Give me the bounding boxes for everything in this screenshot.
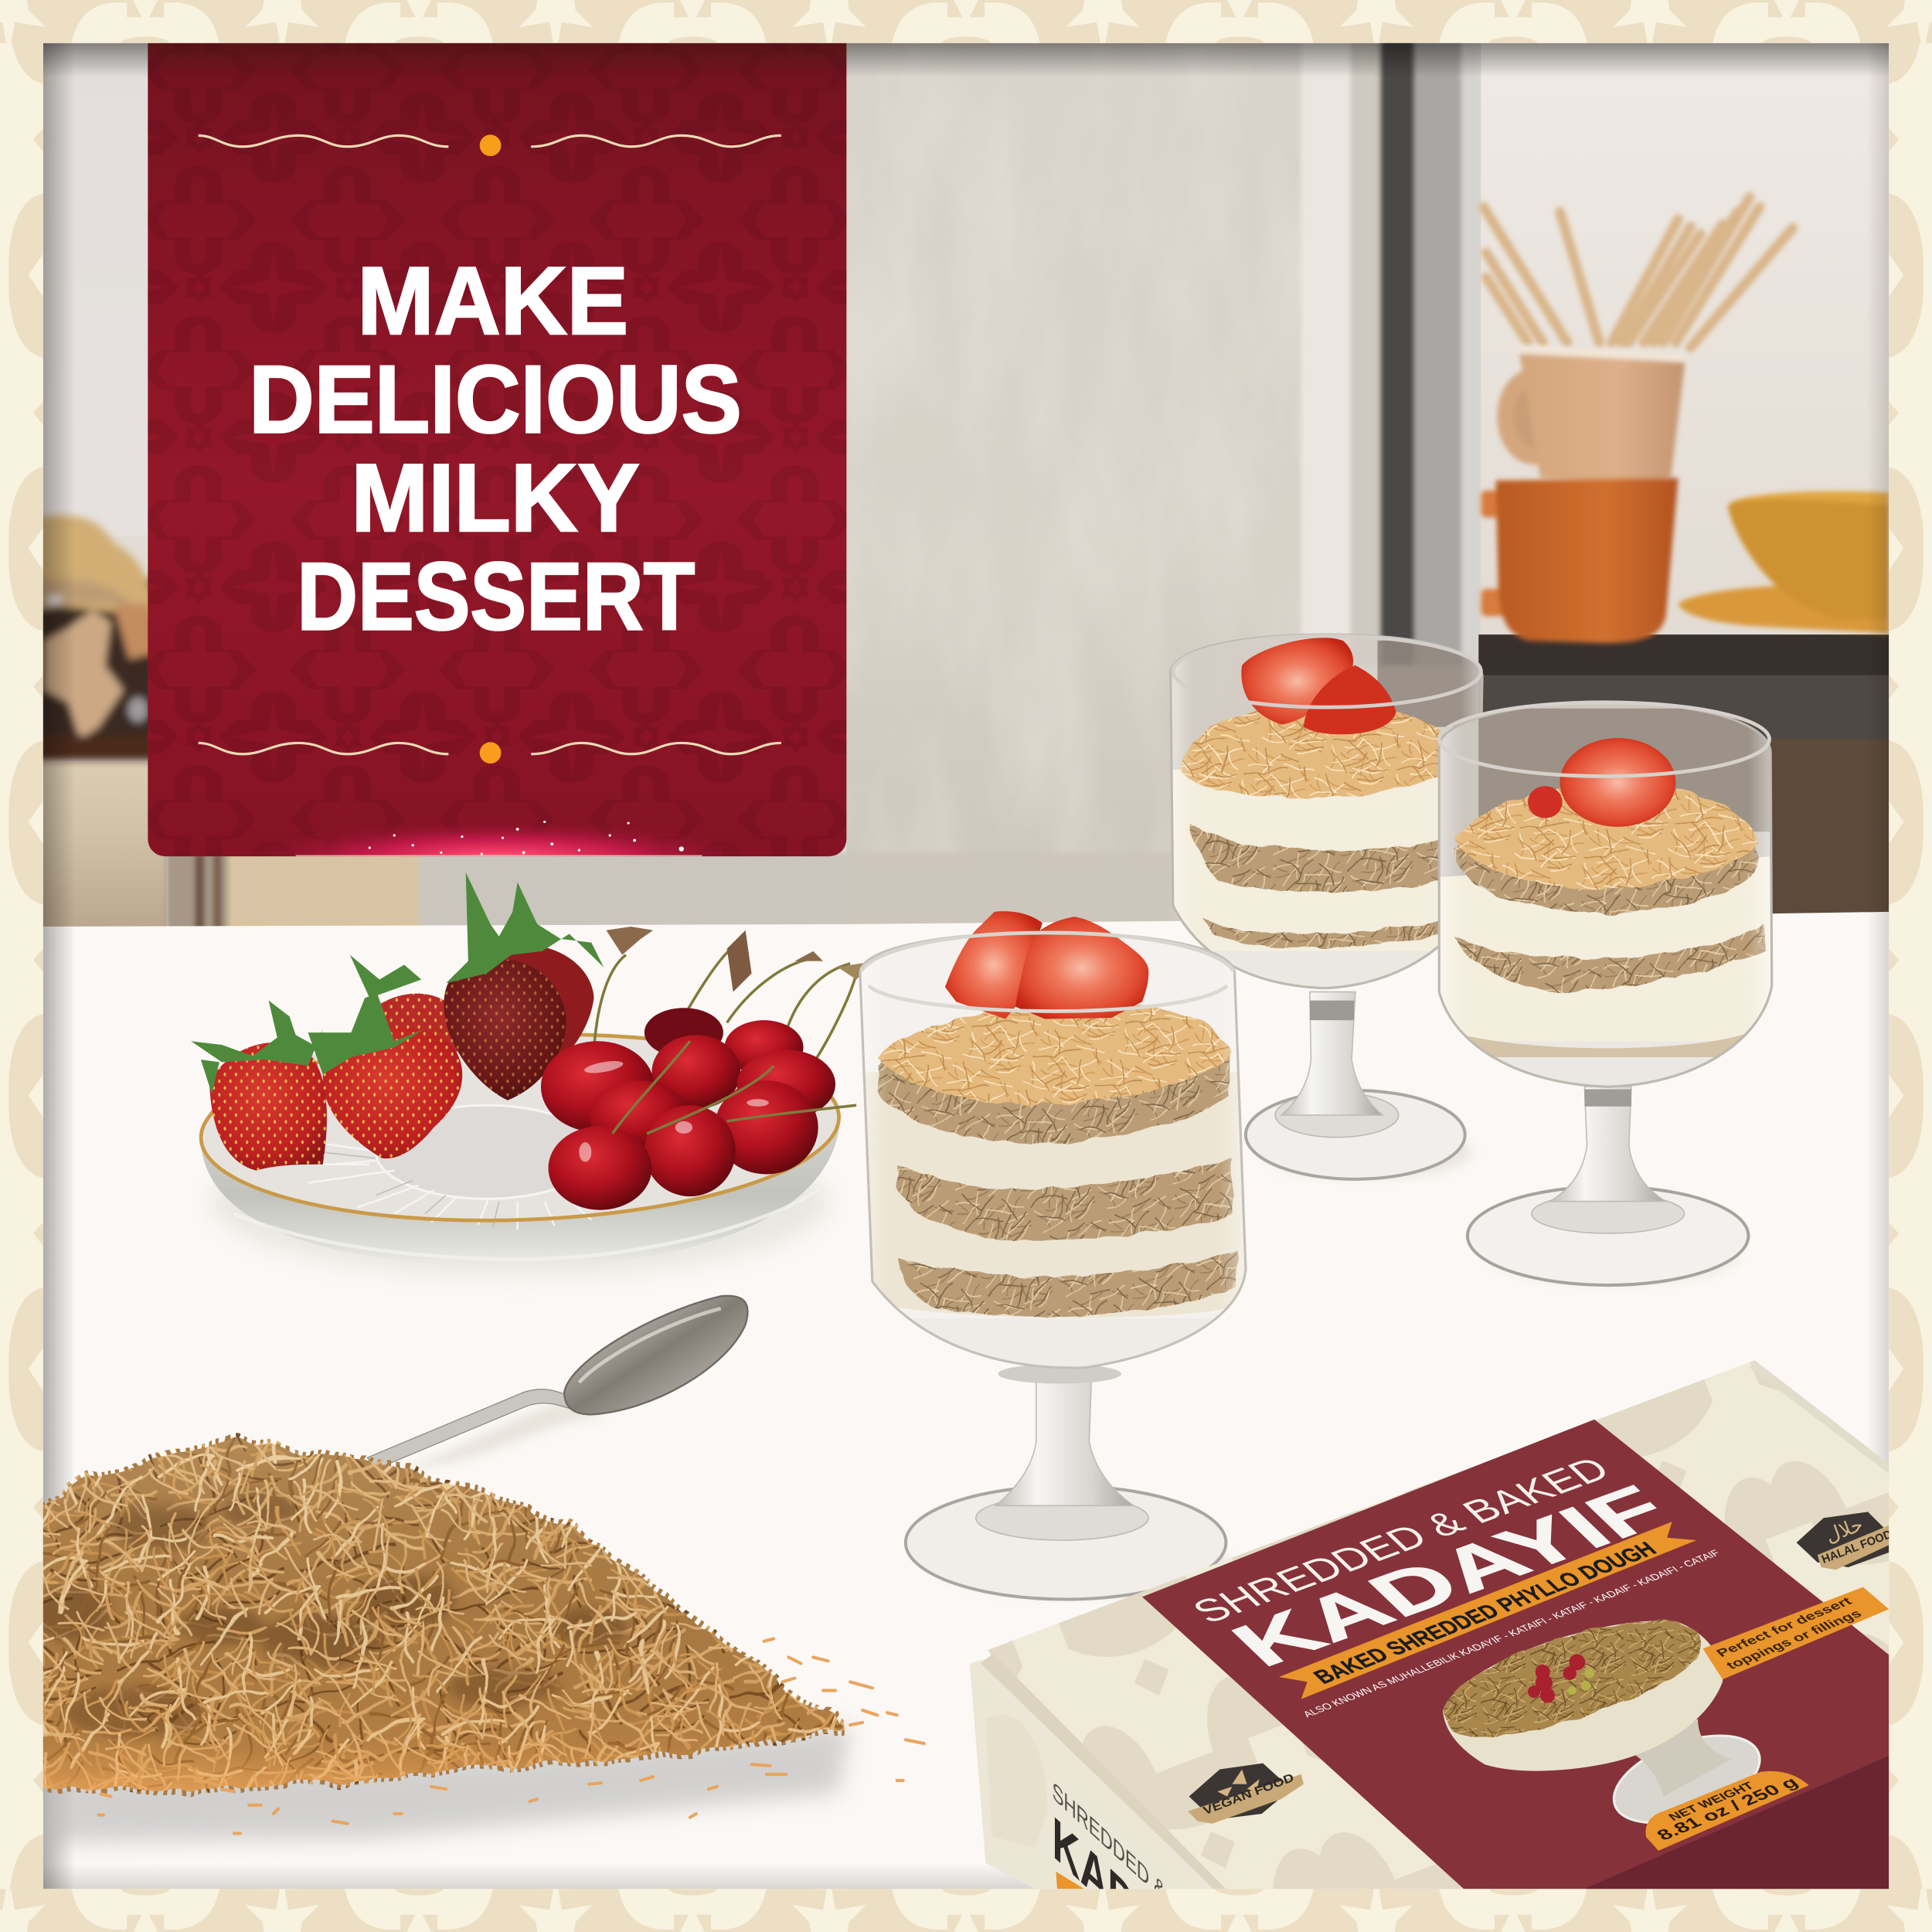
right dessert glass [1435, 696, 1774, 1285]
headline text: MILKY [351, 444, 639, 552]
right glass bowl layers [1435, 696, 1774, 1090]
orange ceramic pot [1481, 478, 1679, 643]
dessert bowl photo on box [1443, 1621, 1771, 1840]
cherries on plate with stems [541, 927, 875, 1210]
headline text: MAKE [357, 247, 628, 355]
net weight badge: NET WEIGHT [1666, 1781, 1757, 1823]
maroon headline panel [148, 43, 846, 903]
perfect for dessert ribbon [1702, 1587, 1889, 1679]
dark ripe strawberry [444, 959, 566, 1100]
white marble table [43, 912, 1889, 1889]
strawberries on plate [191, 872, 604, 1171]
kadayif pile shadow [43, 1725, 850, 1842]
perfect for dessert ribbon: toppings or fillings [1723, 1607, 1865, 1672]
front glass rim [860, 933, 1246, 1368]
back glass strawberry slices [1241, 638, 1396, 734]
tan ceramic mug [1505, 345, 1685, 481]
maroon label [1142, 1420, 1889, 1889]
box front face text: SHREDDED & [1053, 1775, 1165, 1907]
front middle strawberry [323, 1028, 462, 1158]
metal spoon [367, 1296, 747, 1469]
box heading small: SHREDDED & BAKED [1183, 1451, 1619, 1630]
back strawberry [345, 994, 461, 1078]
glass plate with gold rim [198, 1024, 842, 1275]
dried flowers in white vase at left [37, 515, 166, 929]
blurred jar behind the table [166, 852, 1173, 933]
headline text: DESSERT [297, 543, 695, 651]
back glass bowl layers [1165, 628, 1491, 1001]
headline text [249, 247, 742, 651]
net weight badge: 8.81 oz / 250 g [1652, 1774, 1802, 1844]
back glass rim [1171, 634, 1482, 988]
halal food badge: HALAL FOOD [1820, 1528, 1893, 1566]
strawberry leaves [191, 872, 604, 1094]
front dessert glass [856, 911, 1250, 1600]
perfect for dessert ribbon: Perfect for dessert [1713, 1594, 1855, 1659]
blurred kitchen background wall [43, 37, 1889, 943]
shelf with dark surface [1478, 634, 1889, 918]
dark label strip [1584, 1756, 1889, 1889]
scattered kadayif crumbs [99, 1639, 924, 1833]
panel bottom glow [234, 819, 764, 903]
also known as line: ALSO KNOWN AS MUHALLEBILIK KADAYIF - KATAIFI - KATAIF - KADAIF - KADAIFI - CATAIF [1301, 1548, 1723, 1719]
bottom wave divider [199, 742, 781, 764]
front left strawberry [209, 1043, 327, 1171]
halal food badge: حلال [1823, 1514, 1866, 1547]
vegan food badge [1188, 1764, 1304, 1824]
vegan food badge: VEGAN FOOD [1202, 1771, 1296, 1818]
box heading KADAYIF: KADAYIF [1214, 1473, 1685, 1679]
back glass foot and stem [1246, 992, 1465, 1179]
right glass rim [1439, 702, 1772, 1087]
ochre bowl and plate [1679, 492, 1889, 634]
front glass strawberry slices [945, 911, 1148, 1019]
right glass strawberry slice [1528, 738, 1675, 827]
front glass bowl layers [856, 930, 1250, 1380]
back dessert glass [1165, 628, 1491, 1179]
headline text: DELICIOUS [249, 346, 742, 454]
front glass foot and stem [906, 1364, 1226, 1600]
right glass foot and stem [1468, 1087, 1748, 1285]
net weight badge [1645, 1771, 1809, 1851]
strawberry far back right [493, 945, 594, 1072]
shredded kadayif pile [35, 1439, 845, 1791]
kadayif product box [970, 1360, 1893, 1932]
dark gaps in pile [37, 1492, 626, 1740]
wooden sticks in mug [1484, 197, 1793, 348]
top wave divider [199, 134, 781, 156]
box top lid [988, 1360, 1889, 1889]
orange ribbon: BAKED SHREDDED PHYLLO DOUGH [1309, 1539, 1662, 1688]
box front face [970, 1657, 1219, 1889]
halal food badge [1797, 1512, 1893, 1570]
